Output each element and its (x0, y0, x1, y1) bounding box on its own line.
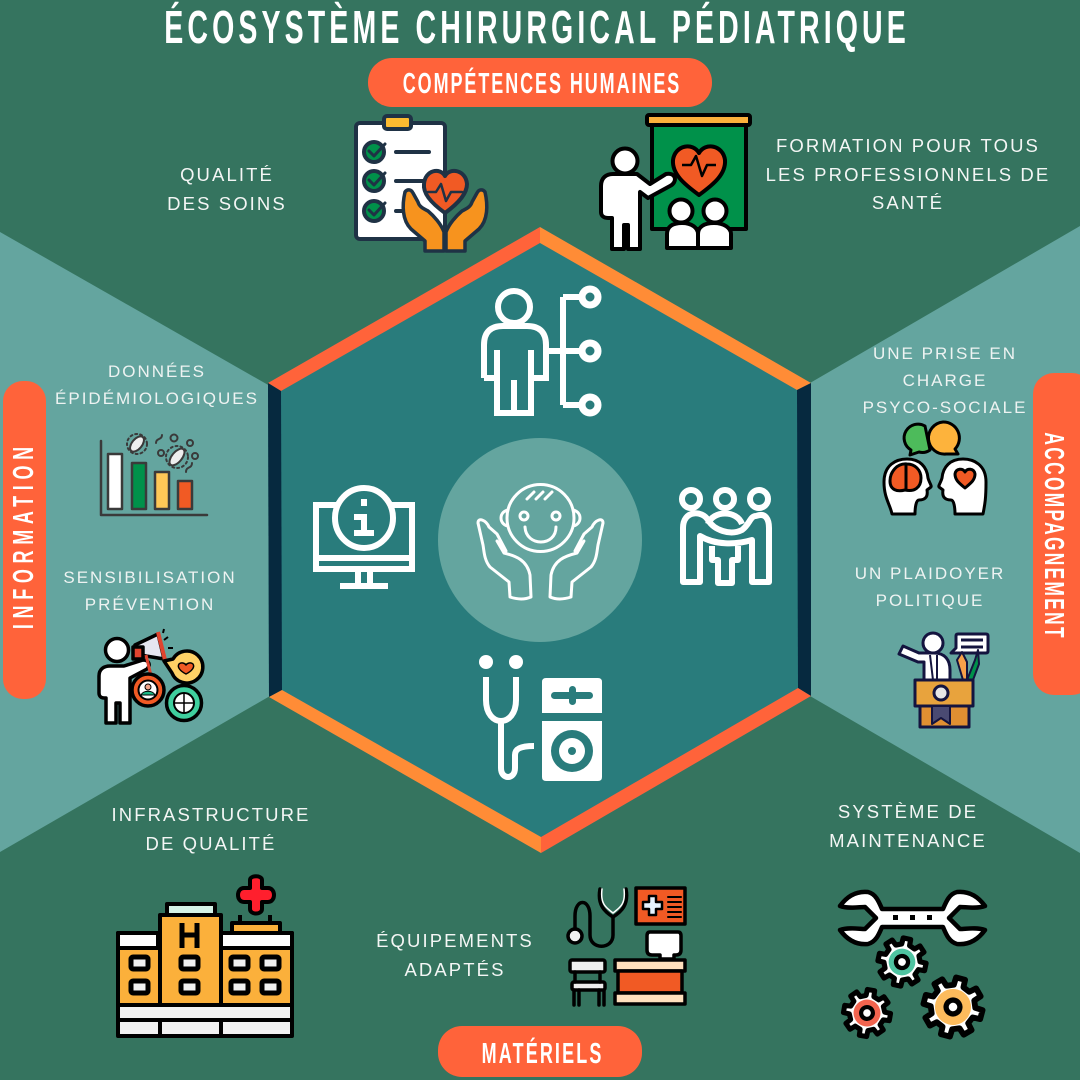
icon: wrench and gears (840, 892, 989, 1043)
icon: presenter with board (601, 115, 750, 249)
title: ÉCOSYSTÈME CHIRURGICAL PÉDIATRIQUE (164, 1, 906, 54)
icon: person with nodes (484, 289, 598, 413)
text: sensibilisation prévention: PRÉVENTION (85, 595, 215, 614)
pill: compétences humaines: COMPÉTENCES HUMAINES (403, 67, 679, 100)
icon: person with megaphone (99, 629, 203, 723)
text: formation: FORMATION POUR TOUS (776, 135, 1040, 156)
pill: compétences humaines (368, 58, 712, 107)
center circle (438, 438, 642, 642)
icon: bar chart with germs (101, 434, 207, 515)
icon: speaker at podium (899, 633, 988, 727)
icon: hospital (118, 876, 292, 1036)
text: données épidémiologiques: ÉPIDÉMIOLOGIQUES (55, 389, 259, 408)
pill: accompagnement (1033, 373, 1080, 695)
icon: medical equipment (568, 888, 685, 1005)
panel: accompagnement (810, 226, 1080, 853)
panel: information (0, 232, 270, 852)
pill: information: INFORMATION (8, 447, 40, 629)
text: plaidoyer: POLITIQUE (876, 591, 984, 610)
icon: monitor info (316, 488, 412, 586)
icon: family (682, 490, 769, 583)
text: plaidoyer: UN PLAIDOYER (855, 564, 1005, 583)
text: infrastructure: INFRASTRUCTURE (112, 804, 310, 825)
text: infrastructure: DE QUALITÉ (146, 833, 276, 854)
text: système de maintenance: MAINTENANCE (829, 830, 987, 851)
pill: matériels: MATÉRIELS (482, 1037, 601, 1070)
text: équipements adaptés: ADAPTÉS (404, 959, 506, 980)
text: prise en charge: UNE PRISE EN (873, 344, 1017, 363)
pill: matériels (438, 1026, 642, 1077)
text: formation: SANTÉ (872, 192, 944, 213)
icon: baby in hands (478, 484, 603, 599)
icon: stethoscope and device (479, 655, 602, 781)
text: prise en charge: CHARGE (903, 371, 987, 390)
icon: clipboard and heart (356, 116, 487, 251)
icon: heads with speech bubbles (884, 422, 986, 514)
text: formation: LES PROFESSIONNELS DE (766, 164, 1050, 185)
text: données épidémiologiques: DONNÉES (108, 362, 206, 381)
central hexagon (268, 227, 811, 853)
pill: information (3, 381, 46, 699)
pill: accompagnement: ACCOMPAGNEMENT (1039, 432, 1070, 638)
text: prise en charge: PSYCO-SOCIALE (863, 398, 1027, 417)
text: système de maintenance: SYSTÈME DE (838, 801, 978, 822)
text: qualité des soins: QUALITÉ (180, 164, 274, 185)
text: équipements adaptés: ÉQUIPEMENTS (376, 930, 534, 951)
text: sensibilisation prévention: SENSIBILISATION (63, 568, 237, 587)
text: qualité des soins: DES SOINS (167, 193, 287, 214)
